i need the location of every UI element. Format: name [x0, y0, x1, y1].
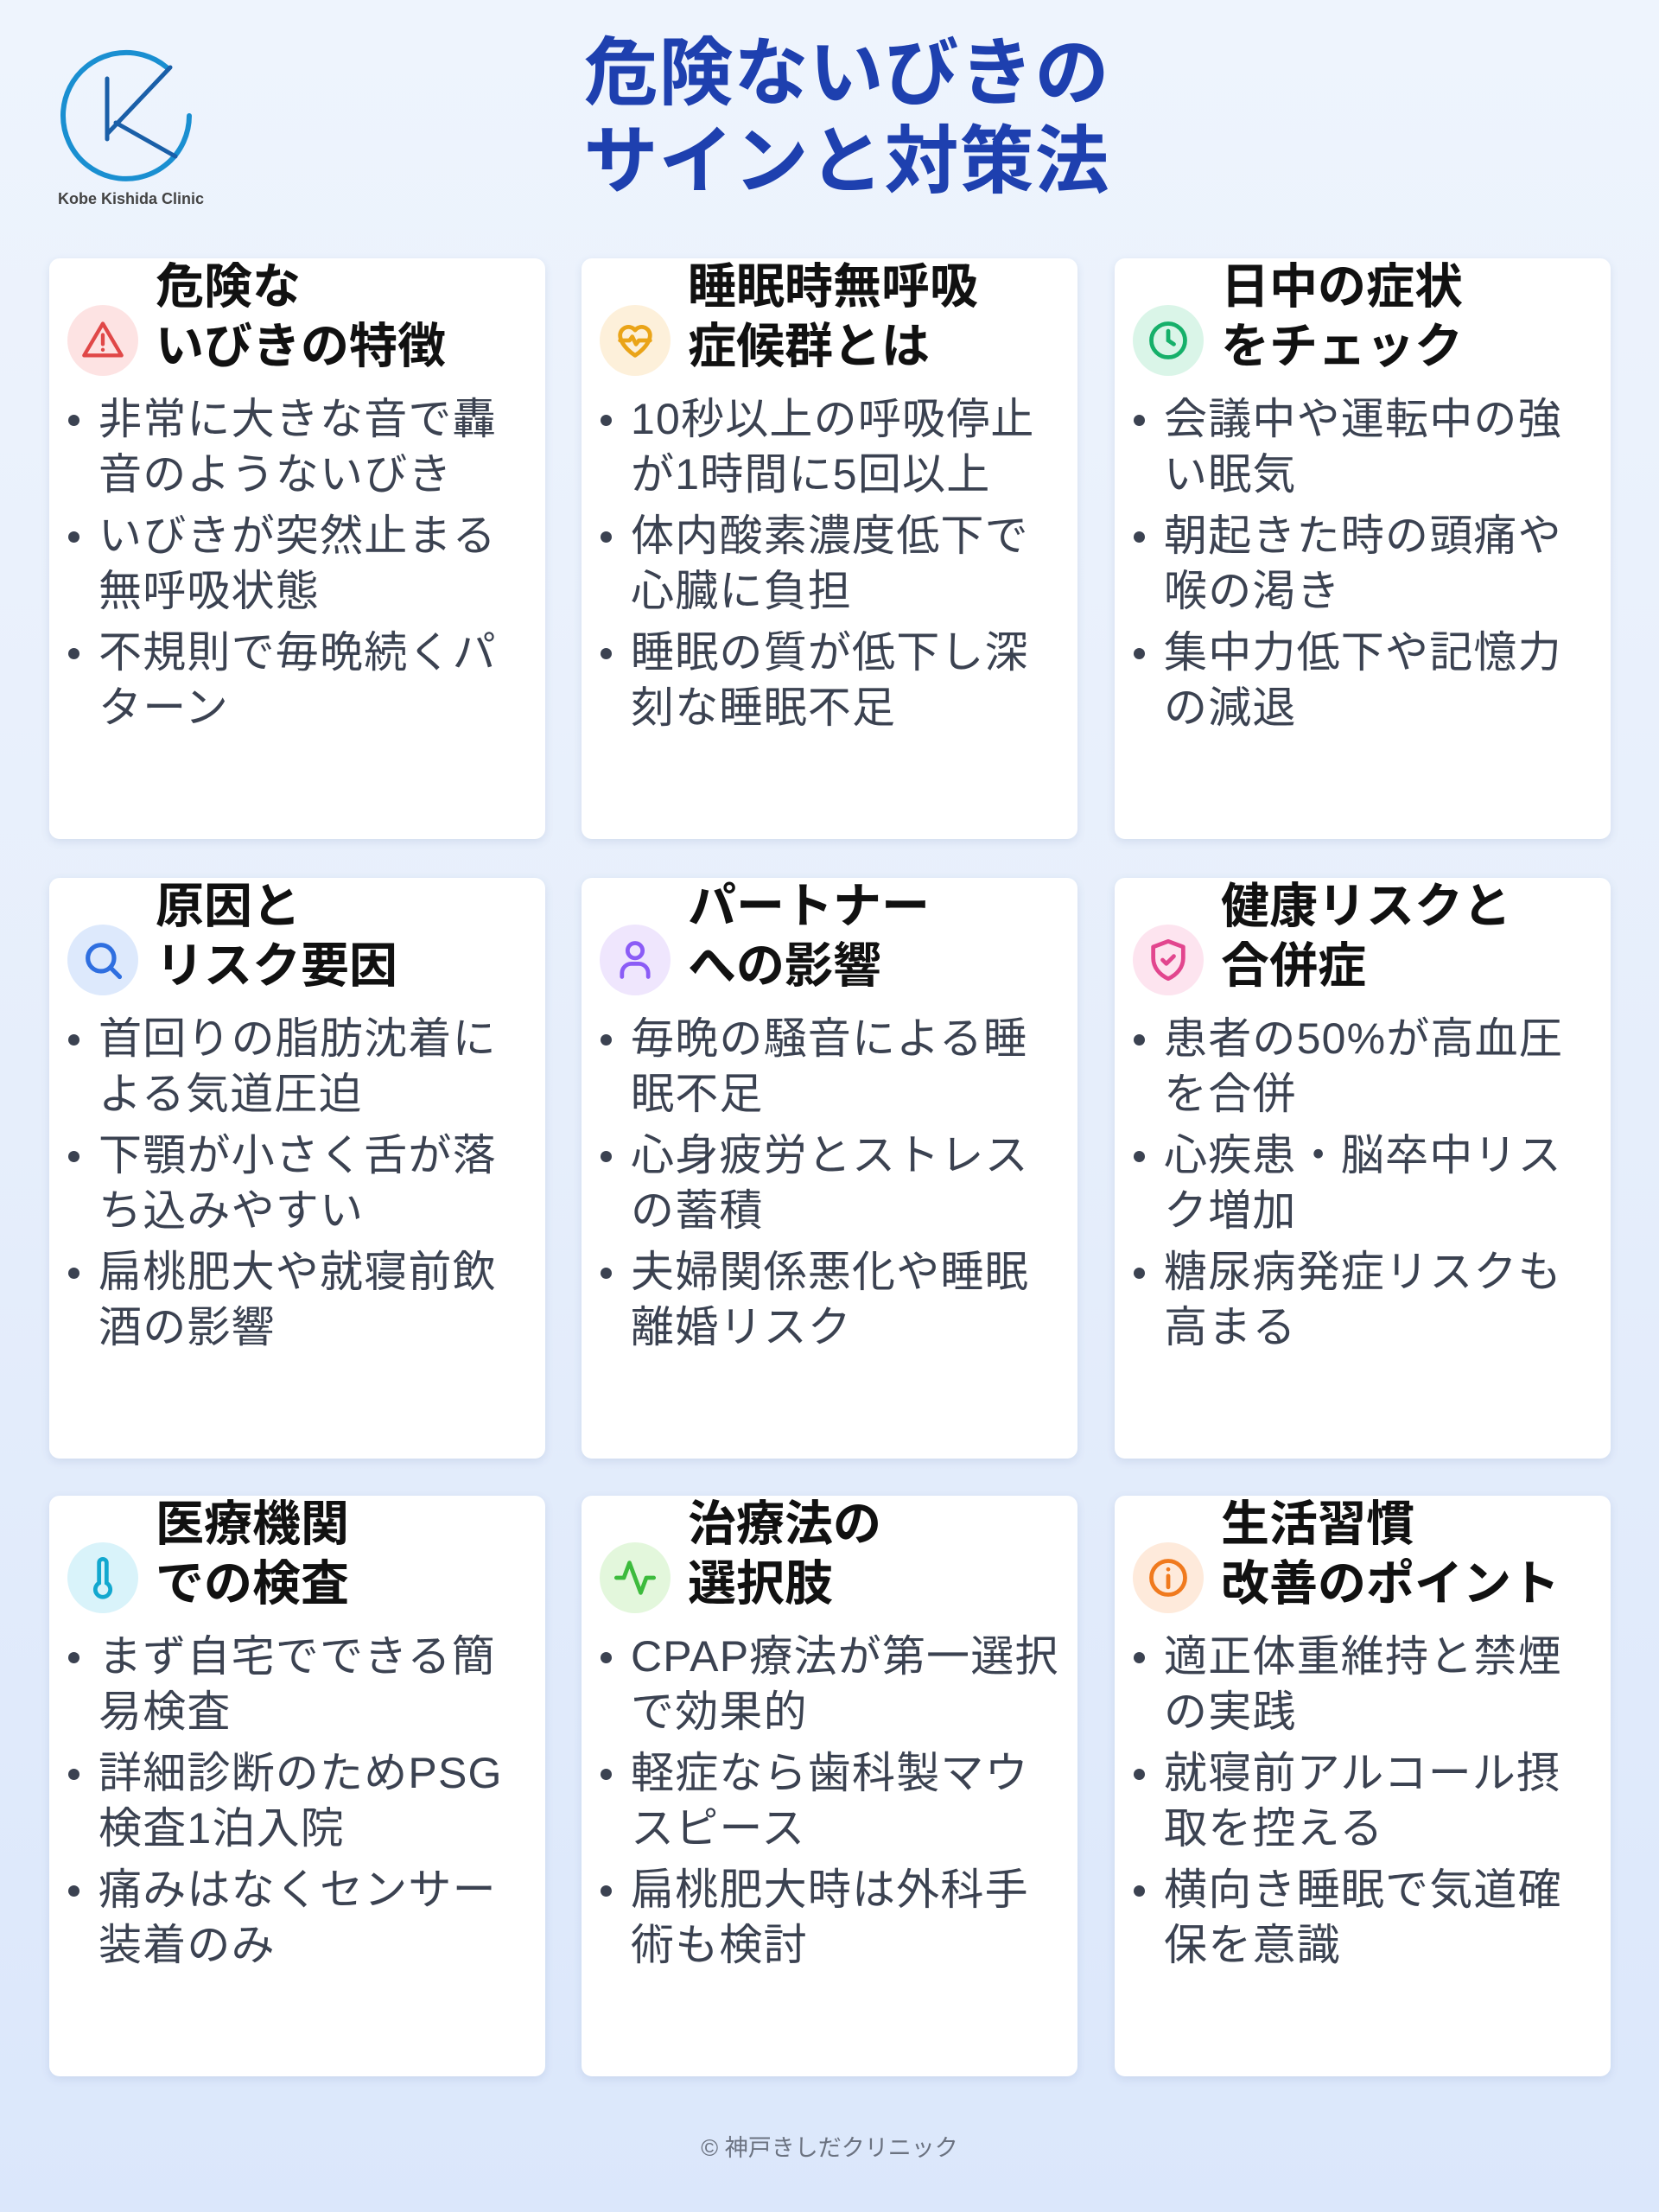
- heading: 睡眠時無呼吸: [688, 259, 978, 314]
- bullets: いびきが突然止まる無呼吸状態: [99, 512, 497, 615]
- bullets: 10秒以上の呼吸停止が1時間に5回以上: [631, 395, 1035, 499]
- bullets: 患者の50%が高血圧を合併: [1164, 1014, 1563, 1118]
- bullets: [601, 395, 1035, 732]
- bullets: 体内酸素濃度低下で心臓に負担: [631, 512, 1029, 615]
- icon: thermometer: [67, 1542, 138, 1613]
- heading: [1221, 879, 1511, 993]
- icon: info: [1133, 1542, 1204, 1613]
- heading: [156, 879, 397, 993]
- bullets: まず自宅でできる簡易検査: [99, 1632, 496, 1736]
- bullets: 軽症なら歯科製マウスピース: [631, 1749, 1029, 1853]
- bullets: CPAP療法が第一選択で効果的: [631, 1632, 1059, 1736]
- heading: 治療法の: [688, 1497, 881, 1551]
- bullets: 痛みはなくセンサー装着のみ: [99, 1866, 497, 1969]
- bullets: [68, 395, 497, 732]
- heading: 危険な: [156, 259, 301, 314]
- bullets: [68, 1014, 497, 1351]
- heading: [156, 259, 446, 373]
- bullets: [1134, 395, 1562, 732]
- heading: 選択肢: [688, 1556, 833, 1611]
- bullets: 適正体重維持と禁煙の実践: [1164, 1632, 1562, 1736]
- heading: 合併症: [1221, 938, 1366, 993]
- icon: clock: [1133, 305, 1204, 376]
- heading: 医療機関: [156, 1497, 349, 1551]
- heading: パートナー: [688, 879, 930, 933]
- icon: activity: [600, 1542, 671, 1613]
- heading: 健康リスクと: [1221, 879, 1511, 933]
- title: [584, 32, 1109, 203]
- panel: daytime symptoms: [1115, 258, 1611, 839]
- bullets: 扁桃肥大時は外科手術も検討: [631, 1866, 1029, 1969]
- panel: causes: [49, 878, 545, 1459]
- icon: heart pulse: [600, 305, 671, 376]
- icon: shield: [1133, 925, 1204, 995]
- heading: 原因と: [156, 879, 301, 933]
- bullets: 非常に大きな音で轟音のようないびき: [99, 395, 497, 499]
- bullets: 心身疲労とストレスの蓄積: [631, 1131, 1029, 1235]
- bullets: [1134, 1014, 1563, 1351]
- bullets: 糖尿病発症リスクも高まる: [1164, 1248, 1562, 1351]
- panel: sleep apnea: [582, 258, 1077, 839]
- heading: での検査: [156, 1556, 349, 1611]
- heading: 症候群とは: [688, 319, 930, 373]
- heading: [1221, 1497, 1560, 1611]
- title: サインと対策法: [584, 120, 1109, 203]
- icon: search: [67, 925, 138, 995]
- bullets: 集中力低下や記憶力の減退: [1164, 628, 1562, 732]
- heading: をチェック: [1221, 319, 1463, 373]
- bullets: [1134, 1632, 1562, 1969]
- bullets: 不規則で毎晩続くパターン: [99, 628, 497, 732]
- panel: medical tests: [49, 1496, 545, 2076]
- heading: 生活習慣: [1221, 1497, 1414, 1551]
- panel: health risks: [1115, 878, 1611, 1459]
- heading: への影響: [688, 938, 881, 993]
- heading: 改善のポイント: [1221, 1556, 1560, 1611]
- bullets: 就寝前アルコール摂取を控える: [1164, 1749, 1560, 1853]
- bullets: [601, 1014, 1029, 1351]
- heading: いびきの特徴: [156, 319, 446, 373]
- panel: lifestyle: [1115, 1496, 1611, 2076]
- footer: © 神戸きしだクリニック: [701, 2135, 958, 2161]
- logo: Kobe Kishida Clinic: [58, 190, 204, 207]
- bullets: 詳細診断のためPSG検査1泊入院: [99, 1749, 503, 1853]
- heading: [688, 259, 978, 373]
- heading: [1221, 259, 1463, 373]
- bullets: 夫婦関係悪化や睡眠離婚リスク: [631, 1248, 1029, 1351]
- heading: [156, 1497, 349, 1611]
- bullets: 横向き睡眠で気道確保を意識: [1164, 1866, 1562, 1969]
- bullets: 睡眠の質が低下し深刻な睡眠不足: [631, 628, 1029, 732]
- icon: warning: [67, 305, 138, 376]
- bullets: 朝起きた時の頭痛や喉の渇き: [1164, 512, 1562, 615]
- icon: person: [600, 925, 671, 995]
- panel: treatments: [582, 1496, 1077, 2076]
- heading: [688, 1497, 881, 1611]
- bullets: 首回りの脂肪沈着による気道圧迫: [99, 1014, 497, 1118]
- heading: [688, 879, 930, 993]
- heading: 日中の症状: [1221, 259, 1463, 314]
- title: 危険ないびきの: [584, 32, 1109, 115]
- bullets: 扁桃肥大や就寝前飲酒の影響: [99, 1248, 497, 1351]
- heading: リスク要因: [156, 938, 397, 993]
- bullets: 会議中や運転中の強い眠気: [1164, 395, 1562, 499]
- logo: [58, 50, 204, 207]
- bullets: 心疾患・脳卒中リスク増加: [1164, 1131, 1562, 1235]
- panel: dangerous snoring: [49, 258, 545, 839]
- bullets: 下顎が小さく舌が落ち込みやすい: [99, 1131, 497, 1235]
- bullets: [68, 1632, 503, 1969]
- bullets: 毎晩の騒音による睡眠不足: [631, 1014, 1027, 1118]
- panel: partner: [582, 878, 1077, 1459]
- bullets: [601, 1632, 1059, 1969]
